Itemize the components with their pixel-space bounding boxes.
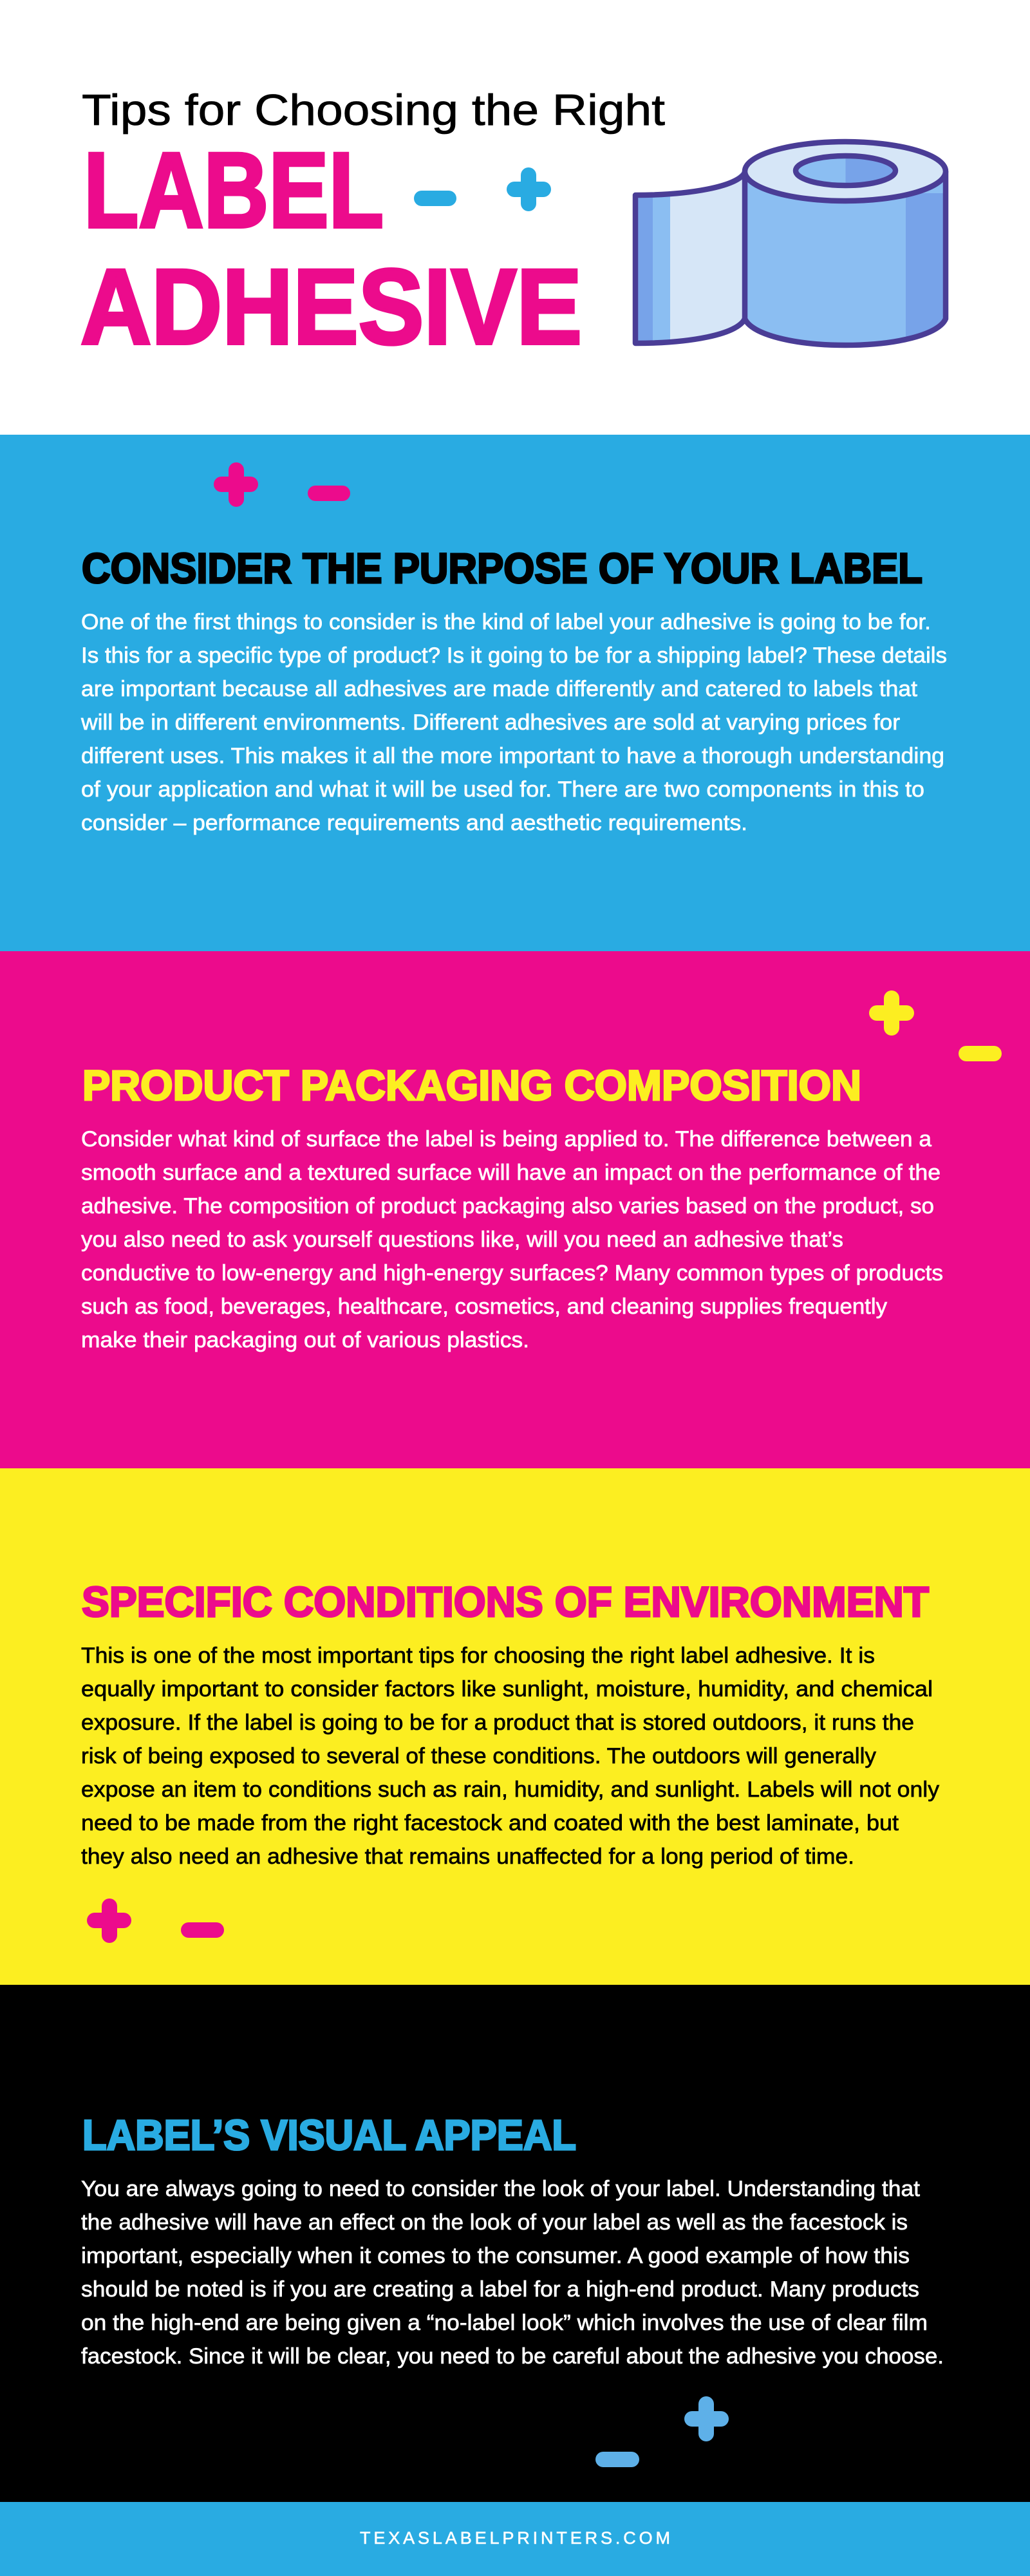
icon: minus (414, 191, 456, 206)
body text: make their packaging out of various plastics. (81, 1328, 529, 1352)
icon: plus (869, 990, 914, 1036)
roll body (745, 171, 946, 345)
icon: plus (214, 462, 258, 507)
body text: expose an item to conditions such as rain, humidity, and sunlight. Labels will not only (81, 1777, 939, 1802)
loose label strip (635, 166, 745, 343)
icon: minus (959, 1046, 1002, 1061)
body text: such as food, beverages, healthcare, cosmetics, and cleaning supplies frequently (81, 1294, 887, 1319)
body text: facestock. Since it will be clear, you need to be careful about the adhesive you choose. (81, 2344, 944, 2369)
icon: minus (308, 486, 350, 501)
body text: need to be made from the right facestock and coated with the best laminate, but (81, 1811, 899, 1835)
heading: PRODUCT PACKAGING COMPOSITION (82, 1061, 861, 1109)
title: tips for choosing: Tips for Choosing the Right (82, 86, 665, 135)
body text (81, 1643, 939, 1869)
heading: CONSIDER THE PURPOSE OF YOUR LABEL (82, 544, 922, 592)
body text: smooth surface and a textured surface will have an impact on the performance of the (81, 1160, 941, 1185)
header background (0, 0, 1030, 435)
body text: equally important to consider factors like sunlight, moisture, humidity, and chemical (81, 1677, 933, 1701)
footer (0, 2502, 1030, 2576)
icon: plus (87, 1899, 131, 1943)
icon: minus (595, 2452, 639, 2467)
body text: conductive to low-energy and high-energy surfaces? Many common types of products (81, 1261, 943, 1285)
body text: on the high-end are being given a “no-label look” which involves the use of clear film (81, 2311, 928, 2335)
roll top (745, 142, 946, 201)
body text: Consider what kind of surface the label is being applied to. The difference between a (81, 1127, 932, 1151)
heading: LABEL’S VISUAL APPEAL (82, 2111, 576, 2159)
icon: plus (684, 2396, 729, 2441)
body text: You are always going to need to consider the look of your label. Understanding that (81, 2177, 921, 2201)
body text: should be noted is if you are creating a label for a high-end product. Many products (81, 2277, 919, 2302)
panel background (0, 435, 1030, 951)
body text: will be in different environments. Different adhesives are sold at varying prices for (80, 710, 900, 735)
body text: exposure. If the label is going to be for a product that is stored outdoors, it runs the (81, 1710, 914, 1735)
body text: One of the first things to consider is the kind of label your adhesive is going to be for. (81, 610, 931, 634)
icon: label tape roll (635, 142, 946, 345)
body text (81, 1127, 943, 1352)
icon: plus (507, 167, 551, 211)
body text: risk of being exposed to several of these conditions. The outdoors will generally (81, 1744, 876, 1768)
title: adhesive: ADHESIVE (80, 247, 582, 367)
footer website text: TEXASLABELPRINTERS.COM (360, 2528, 670, 2548)
body text: different uses. This makes it all the more important to have a thorough understanding (81, 744, 944, 768)
roll core hole (796, 156, 895, 185)
body text (81, 2177, 944, 2369)
panel background (0, 1468, 1030, 1985)
panel: product packaging composition (0, 951, 1030, 1468)
icon: minus (181, 1922, 224, 1938)
body text: of your application and what it will be used for. There are two components in this to (81, 777, 924, 802)
body text: This is one of the most important tips for choosing the right label adhesive. It is (81, 1643, 875, 1668)
title: label: LABEL (84, 131, 384, 250)
panel background (0, 951, 1030, 1468)
heading: SPECIFIC CONDITIONS OF ENVIRONMENT (82, 1578, 929, 1625)
body text (80, 610, 947, 835)
panel background (0, 1985, 1030, 2502)
body text: adhesive. The composition of product packaging also varies based on the product, so (81, 1194, 934, 1218)
body text: you also need to ask yourself questions like, will you need an adhesive that’s (81, 1227, 843, 1252)
body text: consider – performance requirements and aesthetic requirements. (81, 811, 747, 835)
body text: they also need an adhesive that remains unaffected for a long period of time. (81, 1844, 854, 1869)
footer background (0, 2502, 1030, 2576)
header panel (0, 0, 1030, 435)
body text: the adhesive will have an effect on the look of your label as well as the facestock is (81, 2210, 908, 2235)
panel: consider the purpose (0, 435, 1030, 951)
body text: important, especially when it comes to the consumer. A good example of how this (81, 2244, 910, 2268)
panel: specific conditions of environment (0, 1468, 1030, 1985)
body text: Is this for a specific type of product? Is it going to be for a shipping label? These details (81, 643, 947, 668)
panel: label's visual appeal (0, 1985, 1030, 2502)
body text: are important because all adhesives are made differently and catered to labels that (81, 677, 918, 701)
